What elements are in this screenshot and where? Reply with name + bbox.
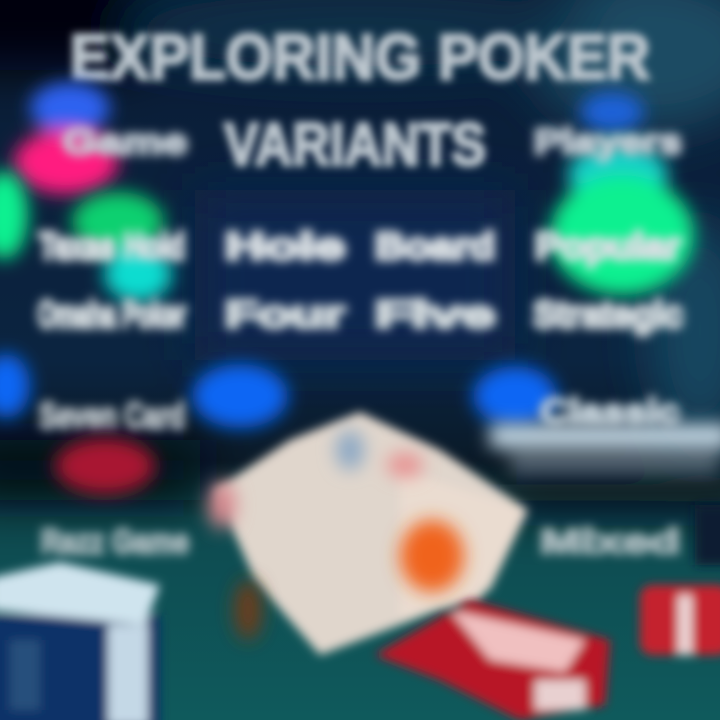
blue chip stack bottom left bbox=[0, 562, 160, 720]
red dice bbox=[375, 600, 610, 720]
title bbox=[70, 21, 650, 178]
lower right label: Classic bbox=[540, 391, 680, 432]
title: EXPLORING POKER bbox=[70, 21, 650, 93]
icon: red chip left bbox=[55, 438, 155, 494]
table row one: Texas Hold bbox=[39, 226, 185, 268]
bottom labels: Razz Game bbox=[41, 523, 189, 561]
table row two bbox=[38, 294, 683, 336]
bottom labels bbox=[41, 523, 680, 561]
playing cards bbox=[208, 412, 528, 655]
table row two: Strategic bbox=[533, 294, 683, 336]
table row two: Five bbox=[375, 294, 495, 336]
table row one: Hole bbox=[225, 226, 345, 268]
blue chips row bbox=[0, 354, 557, 428]
icon: green flask right bbox=[550, 92, 694, 295]
table row one bbox=[39, 226, 681, 268]
column headers: Game bbox=[62, 121, 188, 162]
icon: green and teal shapes left bbox=[0, 171, 172, 302]
bottom labels: Mixed bbox=[540, 523, 680, 561]
table row one: Popular bbox=[535, 226, 681, 268]
column headers: Players bbox=[534, 121, 682, 162]
table row two: Four bbox=[225, 294, 345, 336]
red chips right bbox=[640, 505, 720, 655]
table row two: Omaha Poker bbox=[38, 294, 186, 336]
column headers bbox=[62, 121, 682, 162]
table row one: Board bbox=[375, 226, 495, 268]
icon: blue and pink chip top left bbox=[14, 82, 118, 194]
lower left label: Seven Card bbox=[39, 395, 185, 436]
title: VARIANTS bbox=[224, 111, 486, 178]
right chip stack bbox=[490, 424, 720, 473]
